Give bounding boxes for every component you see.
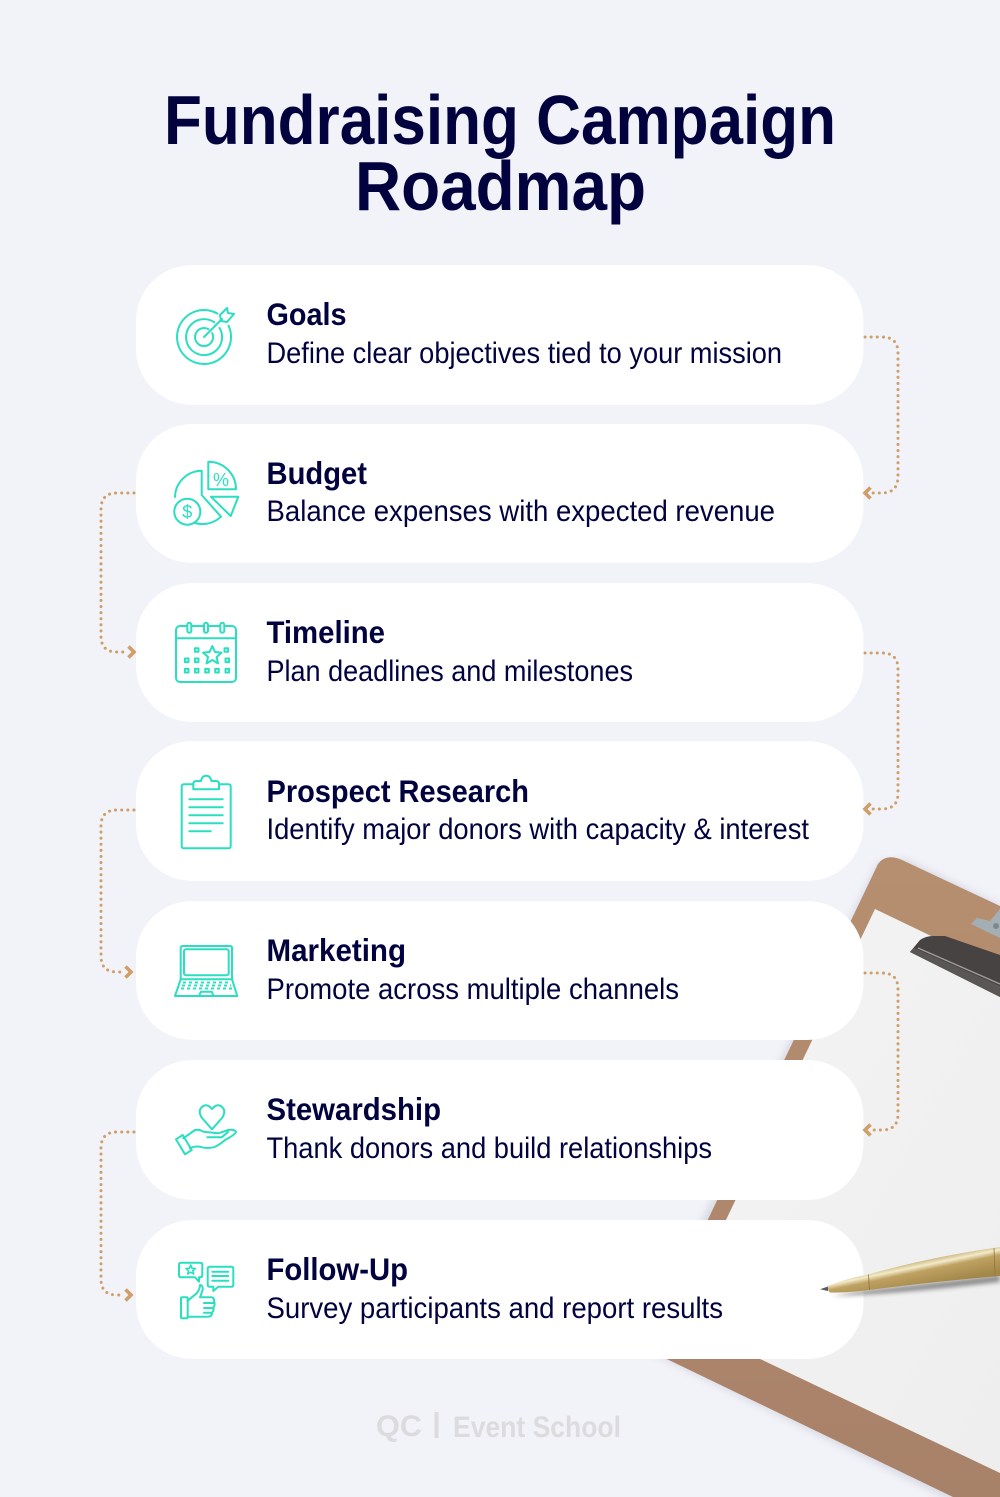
heading: Stewardship <box>266 1091 441 1127</box>
description: Identify major donors with capacity & interest <box>266 813 810 846</box>
description: Promote across multiple channels <box>266 973 679 1006</box>
panel: budget <box>136 424 864 563</box>
card <box>136 265 864 405</box>
heading: Goals <box>266 296 346 332</box>
dotted line <box>865 337 898 493</box>
percent sign: % <box>213 470 229 490</box>
clipboard shadow <box>640 859 1000 1497</box>
icon: pie chart with dollar <box>174 462 238 525</box>
arrow: stewardship to follow-up <box>101 1132 134 1300</box>
arrow: budget to timeline <box>101 493 134 658</box>
title <box>164 81 836 225</box>
logo name: Event School <box>453 1411 621 1444</box>
heading: Marketing <box>266 932 406 968</box>
card <box>136 1220 864 1359</box>
dotted line <box>101 493 134 652</box>
panel: stewardship <box>136 1060 864 1200</box>
clipboard metal clip <box>971 909 1000 938</box>
panel: goals <box>136 265 864 405</box>
arrow: goals to budget <box>865 337 898 498</box>
heading: Budget <box>266 455 367 491</box>
heading: Follow-Up <box>266 1251 408 1287</box>
logo QC: QC <box>376 1410 422 1443</box>
dotted line <box>101 810 134 972</box>
logo: QC Event School <box>376 1410 621 1444</box>
arrow head <box>126 1290 131 1300</box>
card <box>136 583 864 722</box>
icon: thumbs up and speech bubbles <box>179 1263 233 1318</box>
description: Define clear objectives tied to your mission <box>266 337 782 370</box>
arrow: marketing to stewardship <box>865 973 898 1136</box>
clip screw <box>993 923 999 929</box>
description: Balance expenses with expected revenue <box>266 495 775 528</box>
clamp highlight <box>918 948 1000 984</box>
arrow head <box>865 488 870 498</box>
clamp lower band <box>910 948 1000 997</box>
icon: laptop <box>175 946 237 996</box>
arrow: timeline to prospect research <box>865 653 898 814</box>
description: Plan deadlines and milestones <box>266 655 633 688</box>
pen tip <box>820 1286 828 1291</box>
clipboard board <box>646 857 1000 1497</box>
clipboard dark clamp <box>910 936 1000 997</box>
description: Thank donors and build relationships <box>266 1132 712 1165</box>
title line 2: Roadmap <box>355 147 646 225</box>
card <box>136 741 864 881</box>
panel: follow-up <box>136 1220 864 1359</box>
pen body <box>828 1247 1000 1293</box>
arrow head <box>865 804 870 814</box>
arrow head <box>126 966 131 978</box>
clipboard paper <box>678 909 1000 1473</box>
clamp top <box>910 936 1000 997</box>
panel: prospect research <box>136 741 864 881</box>
panel: marketing <box>136 901 864 1040</box>
clip plate <box>971 909 1000 938</box>
heading: Prospect Research <box>266 773 529 809</box>
title line 1: Fundraising Campaign <box>164 81 836 159</box>
arrow head <box>865 1124 870 1136</box>
arrow head <box>128 646 134 658</box>
card <box>136 901 864 1040</box>
card <box>136 424 864 563</box>
icon: calendar <box>176 623 236 682</box>
panel: timeline <box>136 583 864 722</box>
pen joint <box>868 1248 995 1290</box>
card <box>136 1060 864 1200</box>
heading: Timeline <box>266 614 385 650</box>
dollar sign: $ <box>182 502 192 522</box>
dotted line <box>101 1132 134 1295</box>
logo divider <box>434 1412 438 1438</box>
dotted line <box>865 653 898 809</box>
pen shadow <box>832 1275 1000 1296</box>
arrow: prospect research to marketing <box>101 810 134 978</box>
description: Survey participants and report results <box>266 1292 723 1325</box>
photo: gold pen <box>820 1247 1000 1296</box>
icon: clipboard document <box>182 776 231 848</box>
icon: target <box>177 308 234 364</box>
photo: clipboard <box>640 857 1000 1497</box>
icon: hand with heart <box>176 1105 236 1154</box>
dotted line <box>865 973 898 1130</box>
